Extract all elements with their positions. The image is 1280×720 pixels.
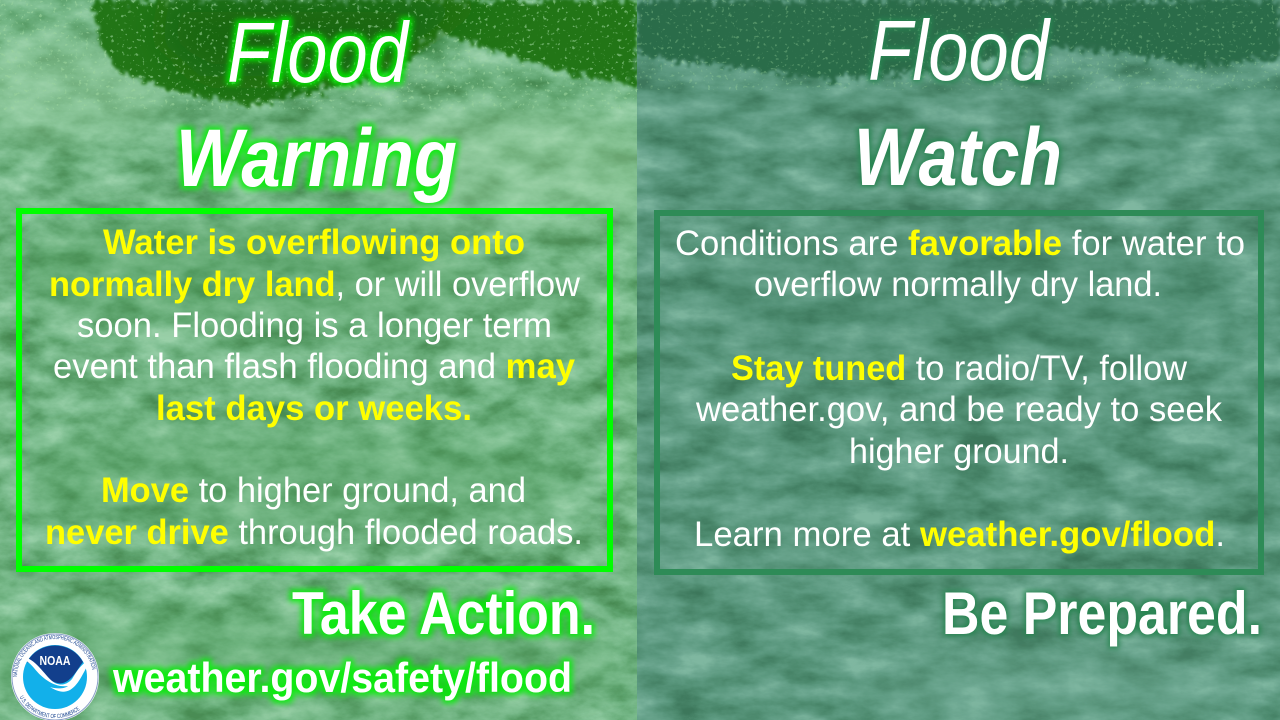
icon: NOAA logo [11, 633, 99, 720]
panel background: flood watch water photo [637, 0, 1280, 720]
panel: warning description box [19, 211, 610, 569]
icon: NOAA logo: U.S. DEPARTMENT OF COMMERCE [20, 695, 80, 718]
warning text block: event than flash flooding and may [53, 347, 576, 386]
warning text block [45, 223, 583, 552]
heading: Flood Watch [854, 4, 1062, 203]
watch text block: weather.gov, and be ready to seek [695, 390, 1222, 429]
warning text block: normally dry land, or will overflow [49, 265, 581, 304]
warning text block: never drive through flooded roads. [45, 513, 583, 552]
heading: Flood Warning [176, 6, 457, 204]
call to action: Take Action: Take Action. [292, 580, 595, 647]
heading: Flood Watch: Flood [868, 4, 1051, 99]
link: weather.gov/safety/flood: weather.gov/safety/flood [112, 654, 572, 701]
warning text block: last days or weeks. [156, 389, 472, 428]
watch text block: Stay tuned to radio/TV, follow [731, 349, 1188, 388]
watch text block: Conditions are favorable for water to [675, 224, 1245, 263]
watch text block: higher ground. [849, 432, 1069, 471]
heading: Flood Warning: Flood [227, 6, 410, 101]
panel: watch description box [657, 213, 1261, 572]
warning text block: Move to higher ground, and [101, 471, 526, 510]
panel background: flood warning water photo [0, 0, 690, 720]
watch text block: Learn more at weather.gov/flood. [694, 515, 1225, 554]
icon: NOAA logo: NATIONAL OCEANIC AND ATMOSPHERIC ADMINISTRATION [12, 634, 96, 677]
warning text block: soon. Flooding is a longer term [77, 306, 552, 345]
heading: Flood Watch: Watch [854, 112, 1062, 203]
watch text block: overflow normally dry land. [754, 265, 1162, 304]
icon: NOAA logo: NOAA [40, 653, 71, 668]
watch text block [675, 224, 1245, 554]
warning text block: Water is overflowing onto [103, 223, 525, 262]
heading: Flood Warning: Warning [176, 113, 457, 204]
